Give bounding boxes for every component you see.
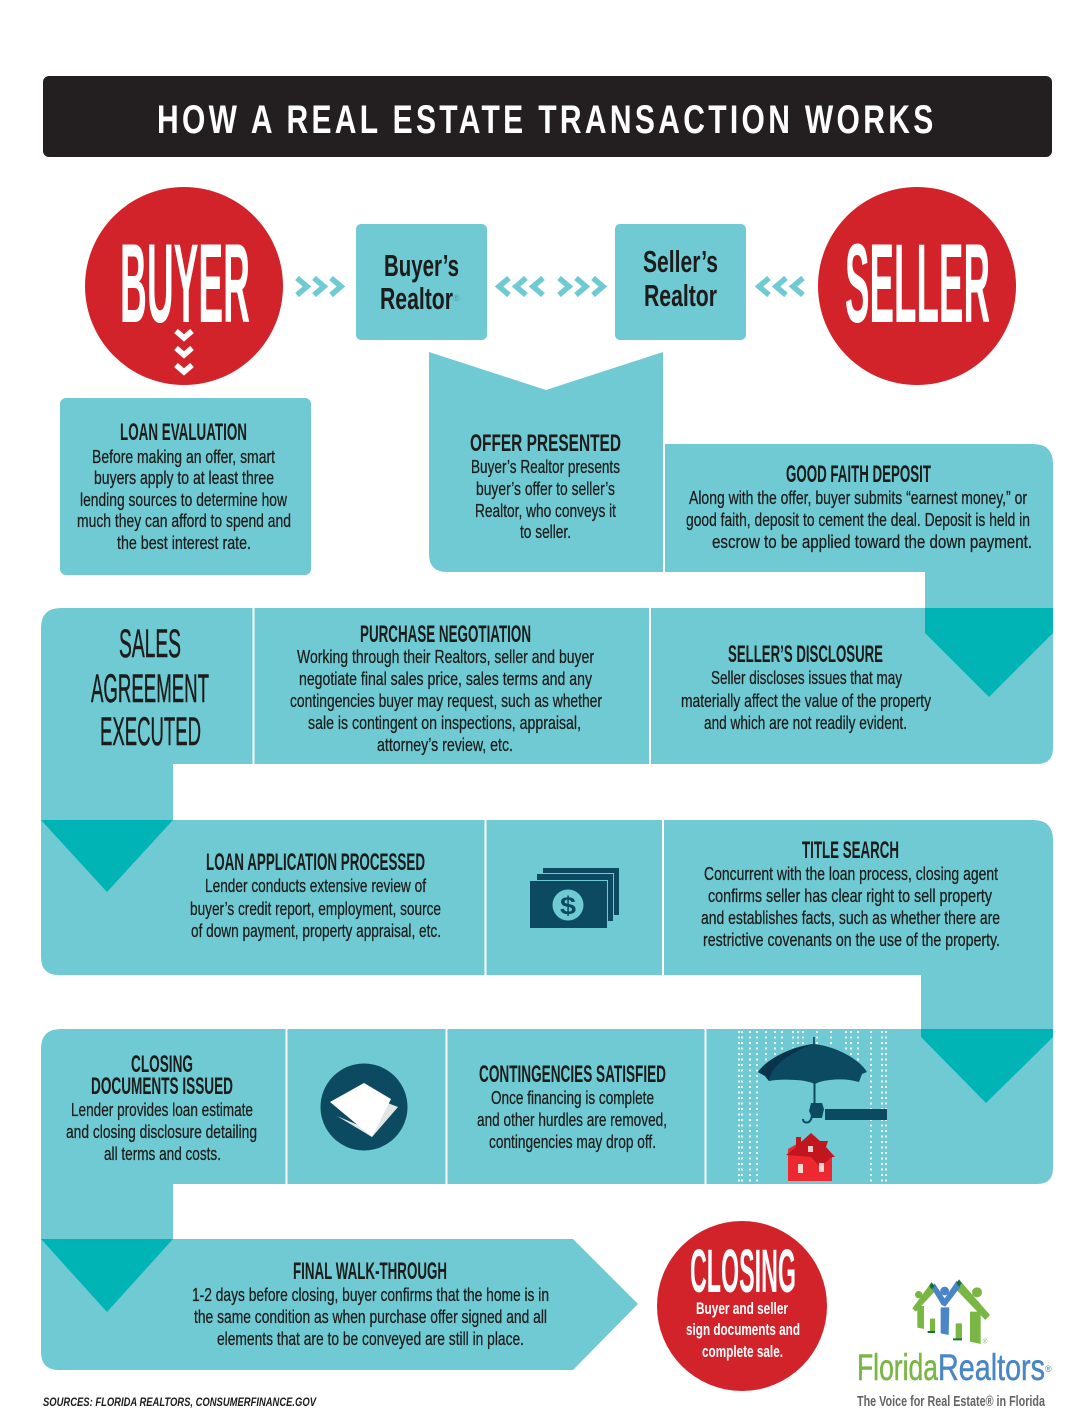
- buyer's realtor box: Realtor: [380, 281, 453, 316]
- title banner: HOW A REAL ESTATE TRANSACTION WORKS: [157, 98, 933, 142]
- seller's realtor box: [615, 224, 746, 340]
- arrows: seller to seller's realtor: [759, 278, 803, 295]
- icon: money: $: [560, 892, 576, 920]
- panel: final walk-through: elements that are to be conveyed are still in place.: [217, 1328, 524, 1349]
- panel: final walk-through: [41, 1239, 638, 1370]
- panel: loan processing row: [41, 820, 1053, 1029]
- panel: loan evaluation: [60, 398, 311, 575]
- title search: confirms seller has clear right to sell property: [708, 885, 993, 906]
- logo: Florida Realtors: [857, 1279, 1052, 1410]
- buyer's realtor box: Buyer’s: [384, 248, 459, 283]
- sales agreement executed: EXECUTED: [100, 710, 201, 754]
- contingencies satisfied: Once financing is complete: [491, 1087, 654, 1108]
- panel: offer presented: Realtor, who conveys it: [475, 500, 616, 521]
- loan application processed: LOAN APPLICATION PROCESSED: [206, 849, 425, 876]
- contingencies satisfied: contingencies may drop off.: [489, 1131, 656, 1152]
- seller's disclosure: materially affect the value of the property: [681, 690, 932, 711]
- sales agreement executed: SALES: [119, 622, 181, 666]
- title search: Concurrent with the loan process, closing agent: [704, 863, 998, 884]
- panel: good faith deposit: GOOD FAITH DEPOSIT: [786, 461, 931, 488]
- contingencies satisfied: CONTINGENCIES SATISFIED: [479, 1061, 666, 1088]
- title banner: [43, 76, 1052, 157]
- panel: good faith deposit: [665, 444, 1053, 697]
- title search: TITLE SEARCH: [802, 837, 899, 864]
- logo: Florida Realtors: ®: [1045, 1364, 1052, 1374]
- buyer circle: [85, 187, 283, 385]
- closing circle: complete sale.: [702, 1342, 783, 1361]
- purchase negotiation: negotiate final sales price, sales terms and any: [299, 668, 593, 689]
- panel: loan evaluation: the best interest rate.: [117, 532, 251, 553]
- arrow: title search to contingencies: [921, 1029, 1053, 1103]
- closing documents issued: [66, 1051, 257, 1164]
- purchase negotiation: Working through their Realtors, seller and buyer: [297, 646, 594, 667]
- panel: contingencies row: [41, 1029, 1053, 1239]
- seller's realtor box: Realtor: [644, 278, 717, 313]
- icon: money: [529, 868, 619, 929]
- arrow: sales agreement to loan application: [41, 820, 173, 892]
- panel: negotiation row: AGREEMENT: [91, 667, 209, 711]
- panel: final walk-through: the same condition as when purchase offer signed and all: [194, 1306, 547, 1327]
- loan application processed: buyer’s credit report, employment, source: [190, 898, 441, 919]
- panel: offer presented: OFFER PRESENTED: [470, 430, 621, 457]
- closing documents issued: and closing disclosure detailing: [66, 1121, 257, 1142]
- panel: loan evaluation: much they can afford to spend and: [77, 510, 291, 531]
- title search: restrictive covenants on the use of the property.: [703, 929, 1000, 950]
- purchase negotiation: PURCHASE NEGOTIATION: [360, 621, 531, 648]
- panel: loan evaluation: Before making an offer, smart: [92, 446, 275, 467]
- logo: Florida Realtors: ®: [983, 1338, 988, 1346]
- arrow: closing documents to final walk-through: [41, 1239, 173, 1312]
- seller circle: [818, 187, 1016, 385]
- buyer's realtor box: ®: [453, 293, 460, 303]
- purchase negotiation: sale is contingent on inspections, appraisal,: [308, 712, 581, 733]
- panel: final walk-through: FINAL WALK-THROUGH: [293, 1258, 447, 1285]
- seller's disclosure: and which are not readily evident.: [704, 712, 907, 733]
- logo: Florida Realtors: Florida: [857, 1347, 938, 1388]
- seller's realtor box: Seller’s: [643, 244, 718, 279]
- arrows: buyer to buyer's realtor: [297, 278, 341, 295]
- panel: loan evaluation: buyers apply to at least three: [94, 467, 274, 488]
- seller's disclosure: [681, 641, 932, 733]
- panel: offer presented: Buyer’s Realtor presents: [471, 456, 620, 477]
- panel: negotiation row: [41, 608, 1053, 820]
- arrow: good faith deposit to seller's disclosure: [925, 608, 1053, 697]
- panel: final walk-through: 1-2 days before closing, buyer confirms that the home is in: [192, 1284, 549, 1305]
- loan application processed: of down payment, property appraisal, etc.: [191, 920, 441, 941]
- loan application processed: Lender conducts extensive review of: [205, 875, 427, 896]
- closing circle: sign documents and: [686, 1320, 800, 1339]
- buyer's realtor box: [356, 224, 487, 340]
- closing documents issued: all terms and costs.: [104, 1143, 221, 1164]
- contingencies satisfied: and other hurdles are removed,: [477, 1109, 667, 1130]
- panel: offer presented: to seller.: [520, 521, 571, 542]
- purchase negotiation: [290, 621, 602, 755]
- panel: offer presented: [429, 352, 663, 572]
- seller's disclosure: SELLER’S DISCLOSURE: [728, 641, 883, 668]
- purchase negotiation: attorney’s review, etc.: [377, 734, 513, 755]
- panel: offer presented: buyer’s offer to seller’s: [476, 478, 615, 499]
- sales agreement executed: [91, 622, 209, 754]
- closing circle: [657, 1221, 827, 1391]
- panel: loan evaluation: LOAN EVALUATION: [120, 419, 247, 446]
- seller's disclosure: Seller discloses issues that may: [711, 667, 903, 688]
- panel: loan evaluation: lending sources to determine how: [80, 489, 287, 510]
- title search: [701, 837, 1000, 950]
- text: BUYER: [120, 221, 250, 346]
- arrows: realtors exchange: [499, 278, 603, 295]
- closing documents issued: Lender provides loan estimate: [71, 1099, 253, 1120]
- logo: Florida Realtors: Realtors: [938, 1347, 1045, 1388]
- closing documents issued: CLOSING: [131, 1051, 193, 1078]
- closing circle: Buyer and seller: [696, 1299, 788, 1318]
- contingencies satisfied: [477, 1061, 667, 1152]
- sources note: SOURCES: FLORIDA REALTORS, CONSUMERFINANCE.GOV: [43, 1397, 317, 1409]
- title search: and establishes facts, such as whether there are: [701, 907, 1000, 928]
- purchase negotiation: contingencies buyer may request, such as whether: [290, 690, 602, 711]
- text: CLOSING: [690, 1237, 796, 1305]
- closing documents issued: DOCUMENTS ISSUED: [91, 1073, 233, 1100]
- icon: documents: [320, 1064, 408, 1150]
- icon: umbrella protecting house in rain: [739, 1031, 887, 1182]
- loan application processed: [190, 849, 441, 941]
